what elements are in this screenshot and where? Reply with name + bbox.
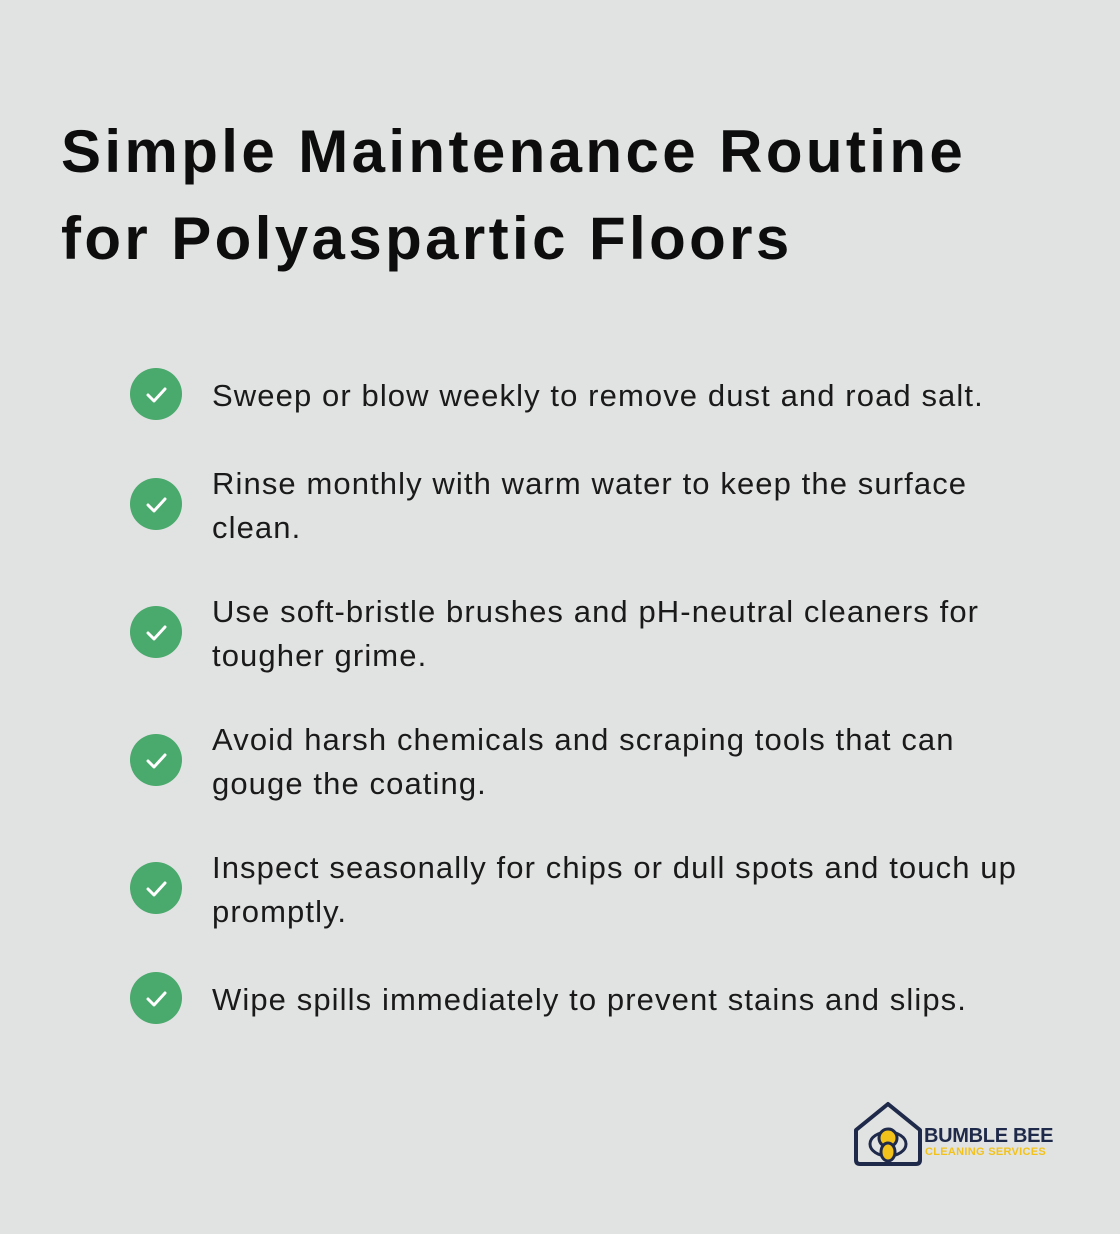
item 6 [130,972,967,1024]
text: Rinse monthly with warm water to keep the surface [212,466,967,501]
title [61,118,966,272]
item 5 [130,850,1017,929]
icon: check [130,972,182,1024]
icon: bee house [854,1102,922,1166]
text: gouge the coating. [212,766,487,801]
text: clean. [212,510,301,545]
text: Use soft-bristle brushes and pH-neutral cleaners for [212,594,979,629]
logo text: BUMBLE BEE [924,1125,1053,1147]
text [212,850,1017,929]
icon: check [130,368,182,420]
title: Simple Maintenance Routine [61,118,966,185]
text: Wipe spills immediately to prevent stains and slips. [212,982,967,1017]
item 4 [130,722,955,801]
text: tougher grime. [212,638,427,673]
icon: check [130,478,182,530]
logo [854,1102,1053,1166]
text [212,594,979,673]
text: Avoid harsh chemicals and scraping tools that can [212,722,955,757]
item 3 [130,594,979,673]
logo: CLEANING SERVICES [925,1146,1046,1158]
text: Inspect seasonally for chips or dull spots and touch up [212,850,1017,885]
icon: check [130,734,182,786]
text: promptly. [212,894,347,929]
item 2 [130,466,967,545]
item 1 [130,368,984,420]
title: for Polyaspartic Floors [61,205,793,272]
text [212,466,967,545]
text: Sweep or blow weekly to remove dust and road salt. [212,378,984,413]
icon: check [130,606,182,658]
text [212,722,955,801]
icon: check [130,862,182,914]
